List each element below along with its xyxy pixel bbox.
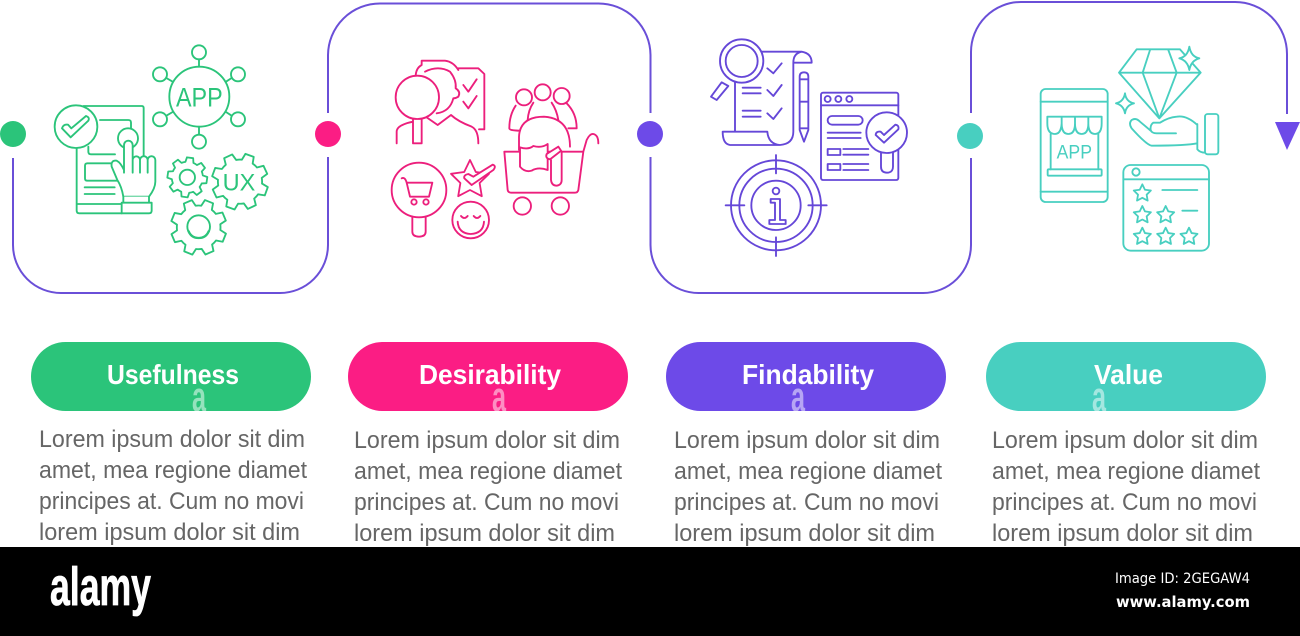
text block: findability (674, 427, 942, 547)
icon: usefulness: UX (223, 170, 255, 197)
text block: value (992, 427, 1260, 547)
arrow: end of timeline (1275, 122, 1300, 150)
text block: desirability: Lorem ipsum dolor sit dim (354, 427, 620, 454)
text block: usefulness: amet, mea regione diamet (39, 457, 307, 484)
text block: findability: amet, mea regione diamet (674, 458, 942, 485)
icon: value: APP (1057, 142, 1092, 163)
stock photo banner: Image ID: 2GEGAW4 (1115, 571, 1250, 587)
text block: findability: principes at. Cum no movi (674, 489, 939, 516)
text block: value: principes at. Cum no movi (992, 489, 1257, 516)
panel: desirability label: a (492, 373, 506, 420)
icon: findability (711, 39, 907, 256)
icon: usefulness (55, 45, 276, 263)
text block: findability: lorem ipsum dolor sit dim (674, 520, 935, 547)
text block: value: Lorem ipsum dolor sit dim (992, 427, 1258, 454)
icon: desirability (392, 61, 598, 238)
text block: value: amet, mea regione diamet (992, 458, 1260, 485)
icon: usefulness: APP (176, 83, 223, 113)
text block: usefulness: principes at. Cum no movi (39, 488, 304, 515)
step dot: usefulness (0, 121, 26, 147)
panel: value label (986, 342, 1266, 420)
panel: findability label: Findability (742, 359, 874, 390)
panel: usefulness label: a (192, 373, 206, 420)
panel: desirability label: Desirability (419, 359, 561, 390)
icon: value (1041, 47, 1218, 251)
step dot: value (957, 123, 983, 149)
panel: usefulness label (31, 342, 311, 420)
text block: desirability: lorem ipsum dolor sit dim (354, 520, 615, 547)
panel: desirability label (348, 342, 628, 420)
stock photo banner: alamy (50, 557, 151, 617)
step dot: desirability (315, 121, 341, 147)
panel: findability label (666, 342, 946, 420)
text block: usefulness (39, 426, 307, 546)
panel: usefulness label: Usefulness (107, 359, 239, 390)
text block: value: lorem ipsum dolor sit dim (992, 520, 1253, 547)
text block: findability: Lorem ipsum dolor sit dim (674, 427, 940, 454)
timeline connector (13, 2, 1287, 293)
panel: value label: a (1092, 373, 1106, 420)
panel: findability label: a (791, 373, 805, 420)
text block: desirability (354, 427, 622, 547)
text block: desirability: amet, mea regione diamet (354, 458, 622, 485)
panel: value label: Value (1094, 359, 1163, 390)
step dot: findability (637, 121, 663, 147)
text block: desirability: principes at. Cum no movi (354, 489, 619, 516)
stock photo banner: www.alamy.com (1116, 593, 1250, 611)
text block: usefulness: Lorem ipsum dolor sit dim (39, 426, 305, 453)
text block: usefulness: lorem ipsum dolor sit dim (39, 519, 300, 546)
stock photo banner (0, 547, 1300, 636)
